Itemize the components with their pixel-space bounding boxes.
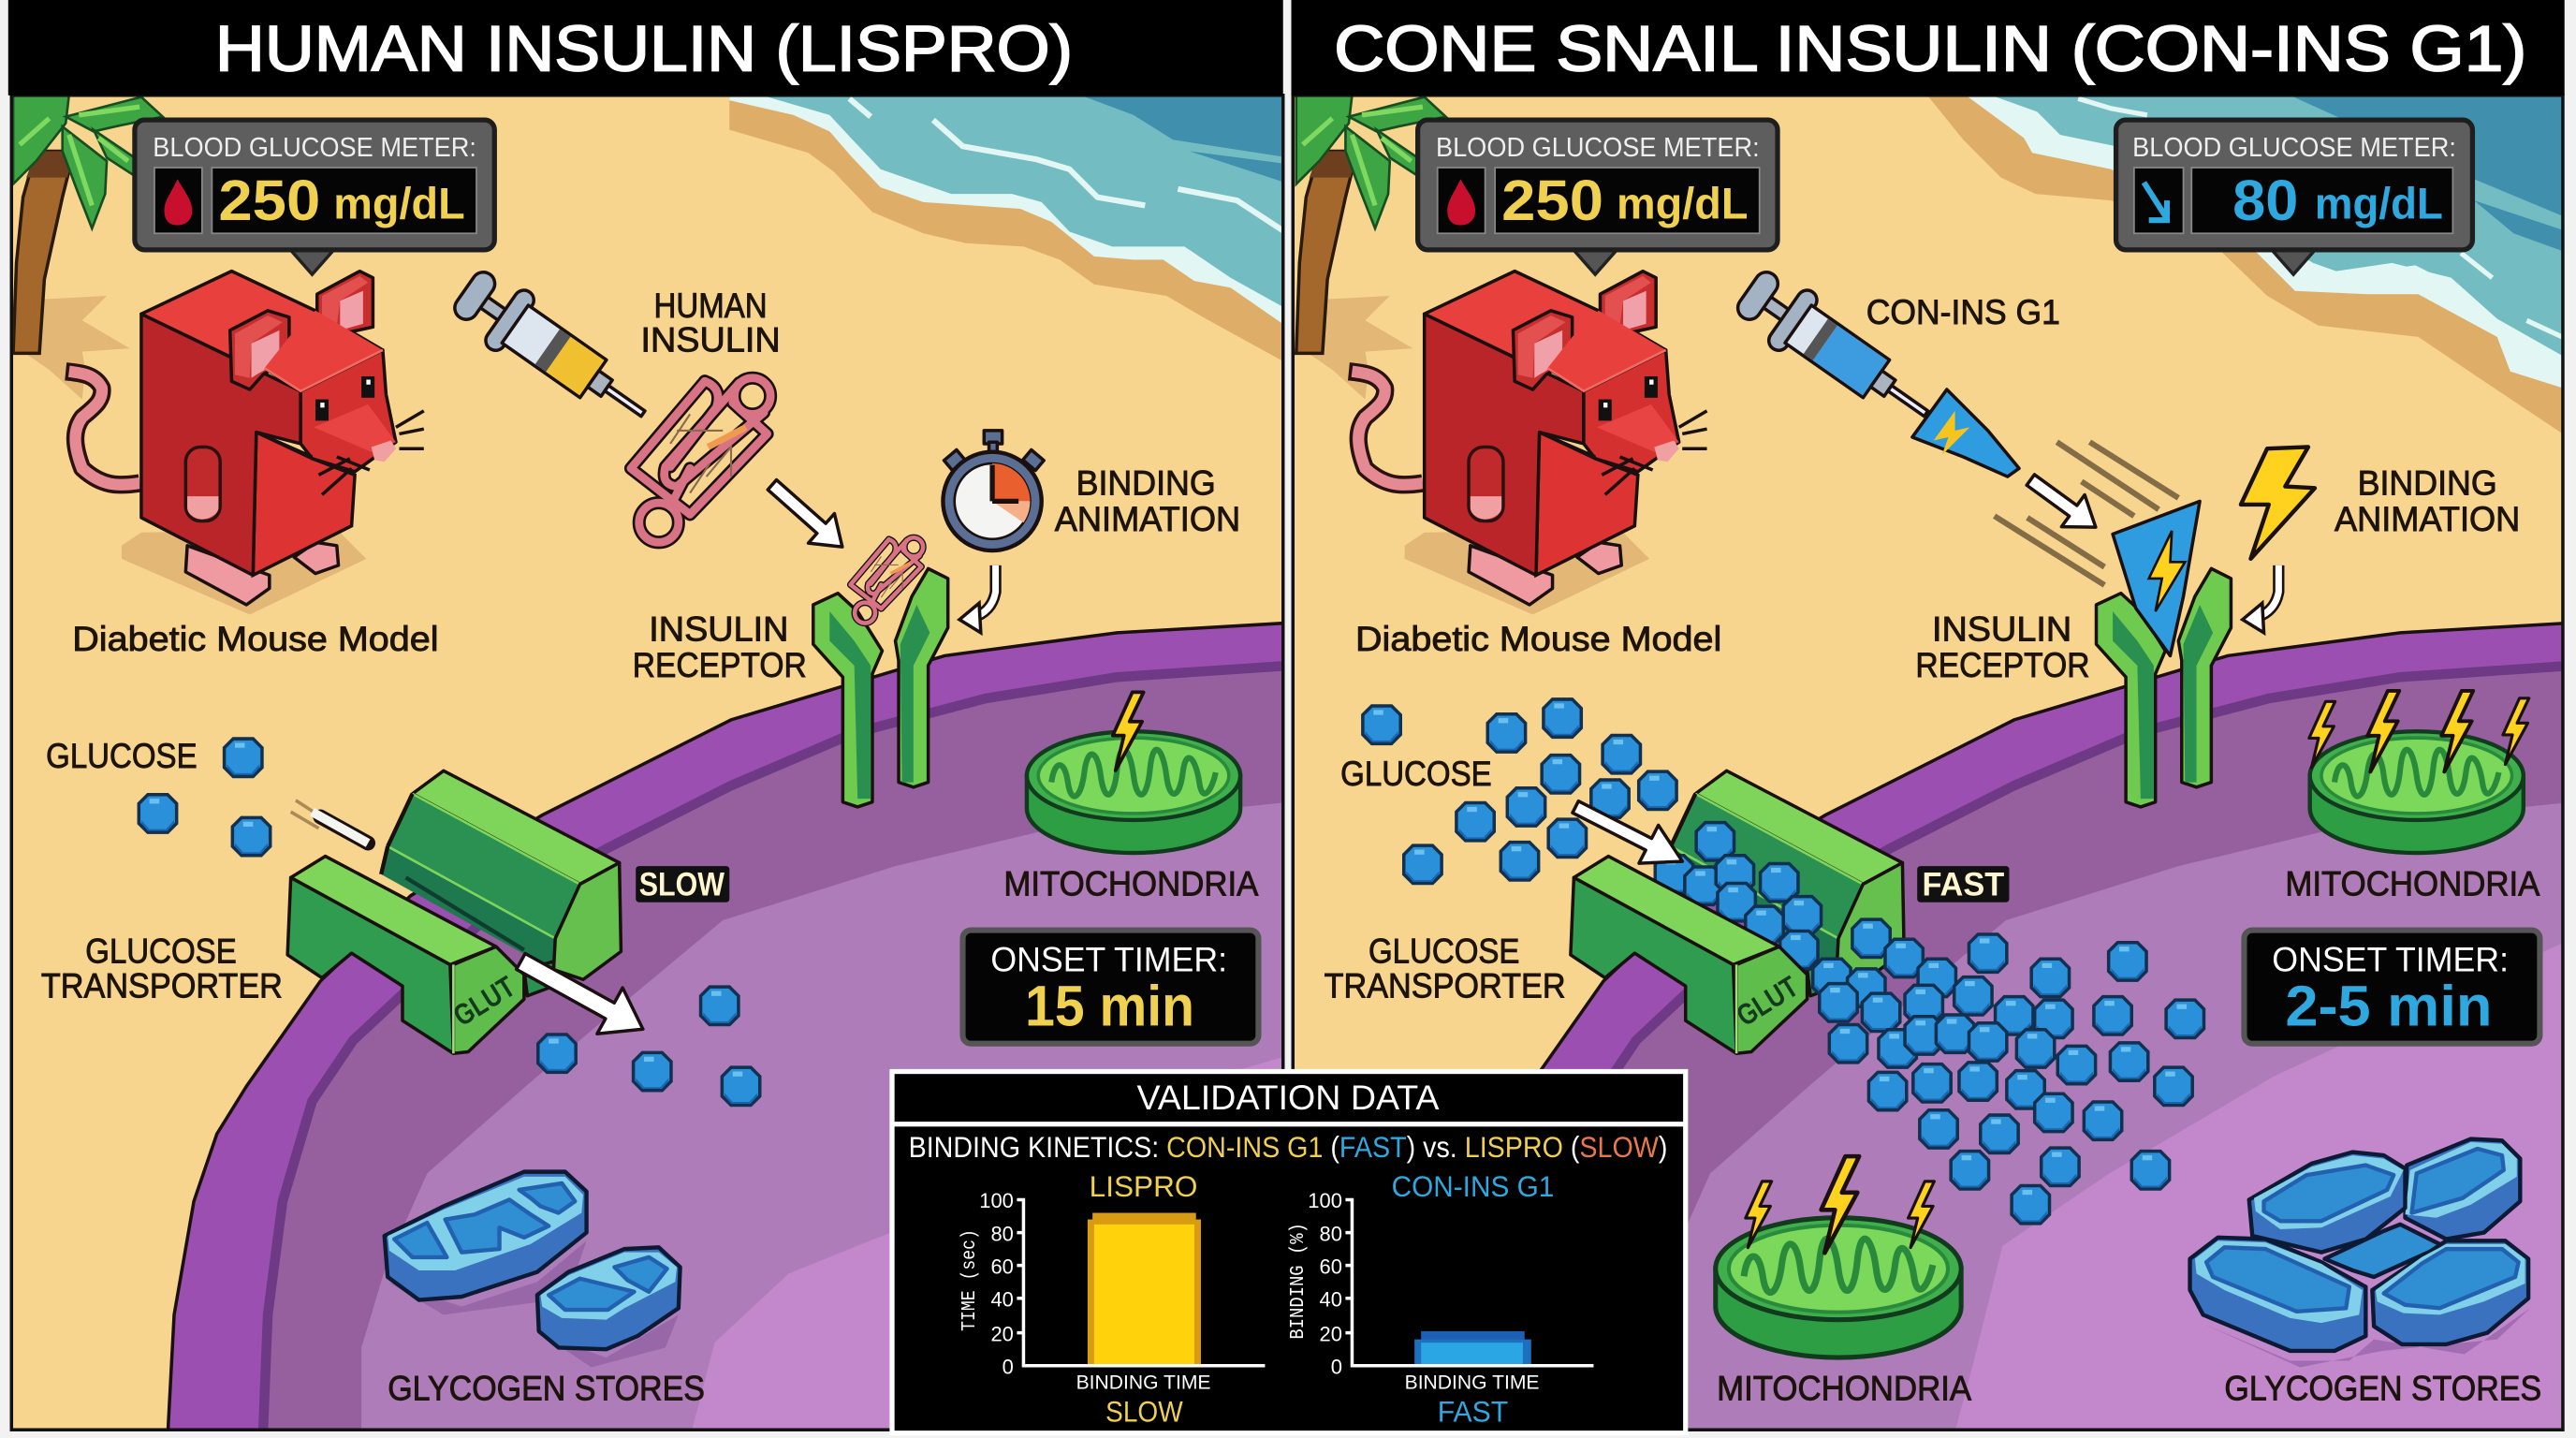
header right	[1292, 0, 2565, 95]
validation title: VALIDATION DATA	[1137, 1078, 1440, 1117]
chart: lispro: 0	[1003, 1356, 1014, 1379]
header right: CONE SNAIL INSULIN (CON-INS G1)	[1334, 12, 2526, 84]
arrow: dart to receptor	[2025, 473, 2098, 529]
onset timer right: 2-5 min	[2285, 974, 2492, 1038]
cell membrane right	[1451, 623, 2572, 1438]
label: mitochondria right lower: MITOCHONDRIA	[1717, 1370, 1972, 1408]
chart: con-ins g1: 80	[1320, 1222, 1342, 1245]
chart: lispro: BINDING TIME	[1076, 1372, 1211, 1393]
syringe blue	[1735, 271, 1930, 418]
label: glucose right: GLUCOSE	[1340, 755, 1492, 793]
glucose transporter front	[287, 857, 524, 1053]
motion lines	[1995, 442, 2178, 585]
label: glucose transporter left: GLUCOSE	[85, 932, 237, 971]
chart: con-ins g1: BINDING TIME	[1405, 1372, 1540, 1393]
label: glucose transporter right: TRANSPORTER	[1325, 967, 1566, 1005]
label: insulin receptor right: RECEPTOR	[1915, 646, 2089, 684]
meter right low	[2116, 120, 2472, 274]
onset timer left: ONSET TIMER:	[990, 940, 1227, 978]
glucose transporter back right	[1664, 770, 1904, 996]
glucose transporter back	[381, 770, 621, 996]
label: binding animation right	[2334, 463, 2520, 538]
header left: HUMAN INSULIN (LISPRO)	[215, 12, 1073, 84]
onset timer right	[2244, 931, 2539, 1044]
cone snail insulin dart	[1912, 389, 2019, 477]
chart: lispro: 60	[990, 1255, 1014, 1278]
mitochondria lower	[1716, 1218, 1961, 1357]
label: binding animation left: BINDING	[1076, 463, 1216, 502]
label: insulin receptor left: RECEPTOR	[633, 646, 807, 684]
label: insulin receptor left: INSULIN	[649, 610, 788, 649]
onset timer left: 15 min	[1025, 974, 1194, 1038]
mitochondria upper	[2310, 731, 2524, 853]
cell membrane	[168, 623, 1290, 1438]
energy bolts upper	[2309, 691, 2529, 771]
label: binding animation left: ANIMATION	[1055, 500, 1240, 538]
icon: palm tree right	[1296, 95, 1445, 353]
chart: con-ins g1	[1287, 1169, 1593, 1428]
chart: lispro: LISPRO	[1090, 1169, 1197, 1203]
label: glycogen left: GLYCOGEN STORES	[388, 1370, 705, 1408]
arrow: glucose fast entry	[1566, 788, 1692, 880]
meter right low: BLOOD GLUCOSE METER:	[2132, 133, 2456, 163]
meter left: 250	[218, 169, 320, 233]
arrow: binding	[959, 565, 996, 633]
label: glucose transporter right	[1325, 932, 1566, 1005]
label: glut left: GLUT	[447, 969, 520, 1033]
label: con-ins g1: CON-INS G1	[1866, 293, 2060, 331]
header left	[8, 0, 1283, 95]
label: mouse right: Diabetic Mouse Model	[1355, 620, 1721, 658]
meter right low: 80	[2232, 169, 2298, 233]
beach water	[729, 92, 1290, 365]
diabetic mouse	[66, 271, 424, 615]
glucose transporter front right	[1571, 857, 1808, 1053]
chart: con-ins g1: 60	[1320, 1255, 1342, 1278]
chart: con-ins g1: FAST	[1438, 1394, 1508, 1428]
chart: con-ins g1: 20	[1320, 1322, 1342, 1345]
panel: cone snail insulin	[1295, 92, 2572, 1438]
mitochondria	[1027, 731, 1240, 853]
arrow: glucose through transporter	[515, 951, 645, 1035]
icon: palm tree	[13, 95, 163, 353]
tag: slow: SLOW	[639, 867, 725, 903]
insulin receptor shape right	[2097, 568, 2231, 807]
chart: lispro: TIME (sec)	[959, 1229, 981, 1331]
icon: big lightning bolt	[2241, 447, 2315, 559]
binding kinetics line: BINDING KINETICS: CON-INS G1 (FAST) vs. LISPRO (SLOW)	[909, 1130, 1667, 1164]
label: binding animation left	[1055, 463, 1240, 538]
chart: lispro	[959, 1169, 1265, 1428]
panel: validation data	[892, 1072, 1686, 1433]
glycogen stores right	[2190, 1139, 2530, 1368]
chart: lispro: 80	[990, 1222, 1014, 1245]
arrow: insulin to receptor	[766, 477, 844, 549]
beach water right	[1928, 92, 2572, 440]
chart: lispro: 100	[979, 1189, 1014, 1212]
chart: con-ins g1: 0	[1331, 1356, 1342, 1379]
icon: stopwatch	[943, 431, 1044, 550]
meter right high: 250	[1501, 169, 1603, 233]
label: binding animation right: BINDING	[2358, 463, 2497, 502]
meter right high: BLOOD GLUCOSE METER:	[1436, 133, 1760, 163]
bound cone snail insulin	[2113, 501, 2200, 655]
glycogen stores	[385, 1172, 681, 1368]
glucose molecules dense	[1363, 699, 1822, 969]
meter left: mg/dL	[333, 179, 465, 228]
label: mitochondria right upper: MITOCHONDRIA	[2285, 865, 2540, 903]
onset timer left	[962, 931, 1258, 1044]
meter left: BLOOD GLUCOSE METER:	[153, 133, 476, 163]
glucose molecules inside cell	[1813, 919, 2203, 1224]
tag: fast: FAST	[1922, 867, 2005, 903]
label: binding animation right: ANIMATION	[2334, 500, 2520, 538]
label: insulin receptor right: INSULIN	[1932, 610, 2071, 649]
meter right high: mg/dL	[1617, 179, 1748, 228]
onset timer right: ONSET TIMER:	[2272, 940, 2509, 978]
label: glycogen right: GLYCOGEN STORES	[2224, 1370, 2541, 1408]
label: mitochondria left: MITOCHONDRIA	[1003, 865, 1259, 903]
chart: con-ins g1: BINDING (%)	[1287, 1223, 1310, 1340]
glucose molecules	[139, 739, 760, 1106]
chart: lispro: 40	[990, 1288, 1014, 1312]
label: glucose transporter right: GLUCOSE	[1368, 932, 1519, 971]
chart: lispro: 20	[990, 1322, 1014, 1345]
meter right low: mg/dL	[2315, 179, 2443, 228]
label: human insulin: HUMAN	[654, 286, 768, 325]
bound insulin	[851, 537, 923, 624]
chart: con-ins g1: CON-INS G1	[1392, 1169, 1554, 1203]
arrow: binding right	[2243, 565, 2278, 633]
label: glucose transporter left	[41, 932, 283, 1005]
icon: energy bolt	[1113, 692, 1144, 770]
chart: lispro: SLOW	[1105, 1394, 1183, 1428]
label: glut right: GLUT	[1731, 969, 1804, 1033]
arrow: glucose entry stub	[291, 800, 368, 844]
label: human insulin	[640, 286, 781, 360]
syringe	[453, 271, 647, 418]
chart: con-ins g1: 40	[1320, 1288, 1342, 1312]
label: insulin receptor right	[1915, 610, 2089, 684]
human insulin molecule	[631, 378, 770, 542]
label: mouse left: Diabetic Mouse Model	[72, 620, 439, 658]
meter left	[135, 120, 494, 274]
label: human insulin: INSULIN	[640, 321, 781, 360]
label: glucose left: GLUCOSE	[46, 737, 198, 775]
panel: human insulin (lispro)	[13, 92, 1290, 1438]
diabetic mouse right	[1349, 271, 1707, 615]
meter right high	[1418, 120, 1778, 274]
insulin receptor shape	[813, 568, 948, 807]
label: glucose transporter left: TRANSPORTER	[41, 967, 283, 1005]
energy bolts lower	[1746, 1156, 1934, 1253]
chart: con-ins g1: 100	[1308, 1189, 1342, 1212]
label: insulin receptor left	[633, 610, 807, 684]
